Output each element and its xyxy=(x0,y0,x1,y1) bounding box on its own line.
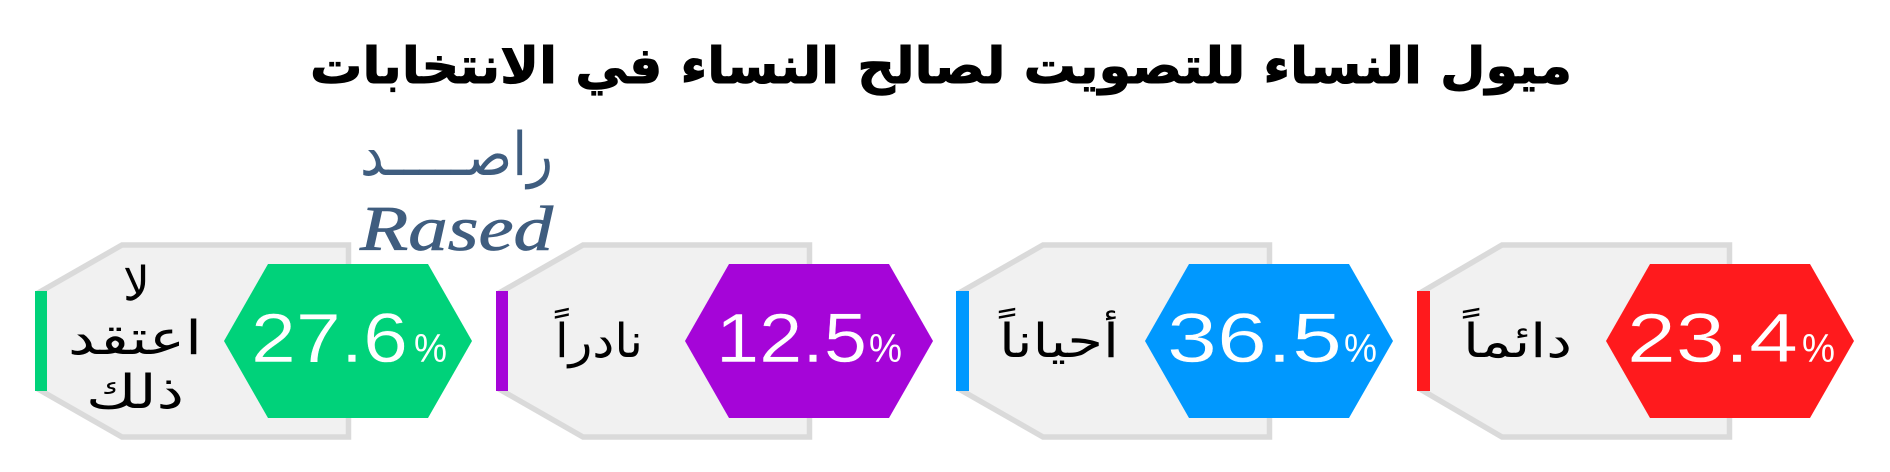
card: sometimes 36.5%: أحياناً xyxy=(999,308,1119,369)
card: rarely 12.5%: نادراً xyxy=(555,308,643,369)
card: don't think so 27.6%: لا xyxy=(123,257,150,312)
card: rarely 12.5%: % xyxy=(869,327,902,371)
card: don't think so 27.6%: ذلك xyxy=(86,365,184,420)
card: always 23.4%: % xyxy=(1802,327,1835,371)
card: don't think so 27.6%: 27.6 xyxy=(251,299,408,377)
card: sometimes 36.5%: % xyxy=(1344,327,1377,371)
card: always 23.4%: 23.4 xyxy=(1627,299,1798,377)
logo: Rased: Rased xyxy=(359,193,554,264)
card: rarely 12.5%: 12.5 xyxy=(716,299,867,377)
card: don't think so 27.6%: % xyxy=(414,327,447,371)
card: sometimes 36.5% xyxy=(956,245,1393,437)
card: always 23.4% xyxy=(1417,245,1854,437)
logo: Rased xyxy=(359,120,554,264)
logo: Rased: راصـــــد xyxy=(360,120,553,190)
card: rarely 12.5% xyxy=(496,245,933,437)
card: don't think so 27.6%: اعتقد xyxy=(68,311,202,366)
title: ميول النساء للتصويت لصالح النساء في الانتخابات xyxy=(310,37,1572,96)
card: always 23.4%: دائماً xyxy=(1463,308,1572,369)
card: don't think so 27.6% xyxy=(35,245,472,437)
card: sometimes 36.5%: 36.5 xyxy=(1167,299,1342,377)
